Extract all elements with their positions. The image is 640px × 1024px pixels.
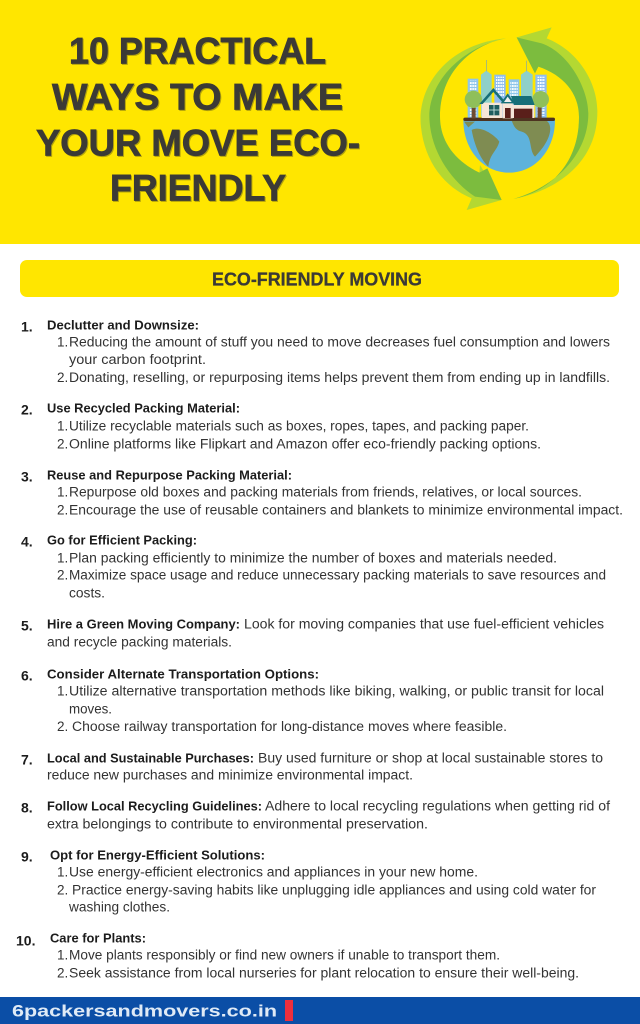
tip 2: use recycled packing material: 2.: [21, 402, 33, 418]
header panel: [0, 0, 640, 244]
tip 9: opt for energy-efficient solutions: Opt for Energy-Efficient Solutions:: [50, 848, 265, 862]
tip 6: consider alternate transportation options: [21, 666, 604, 734]
icon: recycling arrows around globe with house: [421, 27, 597, 210]
tip 4: go for efficient packing: 1.: [57, 550, 68, 566]
title: 10 PRACTICAL: [70, 32, 327, 72]
tip 10: care for plants: Move plants responsibly or find new owners if unable to transport them.: [69, 948, 500, 962]
tip 9: opt for energy-efficient solutions: 9.: [21, 848, 33, 864]
tip 4: go for efficient packing: 2.: [57, 568, 68, 582]
tip 4: go for efficient packing: [21, 532, 606, 600]
section heading bar: ECO-FRIENDLY MOVING: [212, 270, 422, 290]
tip 1: declutter and downsize: [21, 318, 610, 385]
tip 10: care for plants: Seek assistance from local nurseries for plant relocation to ensure their well-being.: [69, 966, 579, 980]
tip 3: reuse and repurpose packing material: 3.: [21, 468, 33, 484]
tip 2: use recycled packing material: Utilize recyclable materials such as boxes, ropes, tapes, and packing paper.: [69, 418, 529, 434]
tip 2: use recycled packing material: Online platforms like Flipkart and Amazon offer eco-friendly packing options.: [69, 436, 541, 452]
tip 6: consider alternate transportation options: 1.: [57, 684, 68, 698]
tip 5: hire a green moving company: Hire a Green Moving Company:: [47, 616, 240, 632]
icon: right arrow: [513, 27, 597, 199]
tip 1: declutter and downsize: Declutter and Downsize:: [47, 318, 199, 332]
tip 1: declutter and downsize: Reducing the amount of stuff you need to move decreases fuel consumption and lowers: [69, 334, 610, 350]
tip 5: hire a green moving company: and recycle packing materials.: [47, 634, 232, 650]
icon: red accent block: [285, 1000, 293, 1021]
tips list: [16, 318, 623, 980]
title: WAYS TO MAKE: [52, 76, 343, 118]
tip 6: consider alternate transportation options: Choose railway transportation for long-distance moves where feasible.: [72, 719, 507, 734]
icon: house: [479, 88, 535, 118]
icon: city buildings: [468, 60, 547, 118]
tip 5: hire a green moving company: [21, 616, 604, 650]
title: WAYS TO MAKE: [53, 78, 344, 118]
tip 8: follow local recycling guidelines: Adhere to local recycling regulations when getting rid of: [265, 798, 610, 814]
tip 5: hire a green moving company: 5.: [21, 618, 33, 634]
tip 7: local and sustainable purchases: Local and Sustainable Purchases:: [47, 750, 254, 766]
tip 5: hire a green moving company: Look for moving companies that use fuel-efficient vehicles: [244, 616, 604, 632]
tip 6: consider alternate transportation options: 6.: [21, 668, 33, 684]
tip 4: go for efficient packing: 4.: [21, 534, 33, 550]
tip 6: consider alternate transportation options: Utilize alternative transportation methods like biking, walking, or public transit for local: [69, 684, 604, 698]
tip 1: declutter and downsize: 2.: [57, 370, 68, 385]
tip 2: use recycled packing material: 1.: [57, 418, 68, 434]
tip 8: follow local recycling guidelines: Follow Local Recycling Guidelines:: [47, 798, 262, 814]
tip 3: reuse and repurpose packing material: 1.: [57, 484, 68, 500]
tip 4: go for efficient packing: Go for Efficient Packing:: [47, 532, 197, 548]
tip 9: opt for energy-efficient solutions: 2.: [57, 882, 68, 898]
tip 9: opt for energy-efficient solutions: [21, 848, 597, 914]
tip 7: local and sustainable purchases: [21, 750, 603, 782]
tip 3: reuse and repurpose packing material: 2.: [57, 502, 68, 518]
tip 4: go for efficient packing: costs.: [69, 586, 105, 600]
section heading bar: [20, 260, 619, 297]
tip 4: go for efficient packing: Maximize space usage and reduce unnecessary packing materials to save resources and: [69, 568, 606, 582]
tip 3: reuse and repurpose packing material: [21, 468, 623, 518]
tip 1: declutter and downsize: 1.: [21, 318, 33, 334]
tip 6: consider alternate transportation options: moves.: [69, 702, 112, 716]
tip 3: reuse and repurpose packing material: Repurpose old boxes and packing materials from friends, relatives, or local sources.: [69, 484, 582, 500]
tip 10: care for plants: [16, 930, 579, 980]
tip 7: local and sustainable purchases: reduce new purchases and minimize environmental impact.: [47, 768, 413, 782]
tip 8: follow local recycling guidelines: [21, 798, 610, 832]
tip 9: opt for energy-efficient solutions: 1.: [57, 864, 68, 880]
icon: globe: [463, 118, 555, 173]
tip 2: use recycled packing material: Use Recycled Packing Material:: [47, 400, 240, 416]
tip 9: opt for energy-efficient solutions: Use energy-efficient electronics and appliances in your new home.: [69, 864, 478, 880]
tip 6: consider alternate transportation options: Consider Alternate Transportation Options:: [47, 666, 319, 682]
icon: trees: [465, 91, 549, 118]
tip 2: use recycled packing material: [21, 400, 541, 452]
tip 10: care for plants: 10.: [16, 932, 35, 948]
tip 1: declutter and downsize: Donating, reselling, or repurposing items helps prevent them from ending up in landfills.: [69, 370, 610, 385]
tip 1: declutter and downsize: your carbon footprint.: [69, 352, 206, 367]
tip 8: follow local recycling guidelines: extra belongings to contribute to environmental preservation.: [47, 816, 428, 832]
title: FRIENDLY: [110, 168, 286, 208]
title: [36, 30, 361, 210]
tip 4: go for efficient packing: Plan packing efficiently to minimize the number of boxes and materials needed.: [69, 550, 557, 566]
footer bar: [0, 997, 640, 1024]
title: YOUR MOVE ECO-: [37, 124, 361, 164]
icon: left arrow: [421, 38, 506, 210]
tip 7: local and sustainable purchases: 7.: [21, 752, 33, 768]
tip 3: reuse and repurpose packing material: Reuse and Repurpose Packing Material:: [47, 468, 292, 482]
tip 8: follow local recycling guidelines: 8.: [21, 800, 33, 816]
tip 7: local and sustainable purchases: Buy used furniture or shop at local sustainable stores to: [258, 750, 603, 766]
tip 10: care for plants: Care for Plants:: [50, 930, 146, 946]
tip 9: opt for energy-efficient solutions: Practice energy-saving habits like unplugging idle appliances and using cold water for: [72, 882, 597, 898]
tip 10: care for plants: 1.: [57, 948, 68, 962]
tip 9: opt for energy-efficient solutions: washing clothes.: [68, 900, 170, 914]
tip 3: reuse and repurpose packing material: Encourage the use of reusable containers and blankets to minimize environmental impact.: [69, 502, 623, 518]
tip 2: use recycled packing material: 2.: [57, 436, 68, 452]
tip 1: declutter and downsize: 1.: [57, 334, 68, 350]
tip 6: consider alternate transportation options: 2.: [57, 719, 68, 734]
footer bar: 6packersandmovers.co.in: [12, 1002, 277, 1020]
tip 10: care for plants: 2.: [57, 966, 68, 980]
title: YOUR MOVE ECO-: [36, 122, 360, 164]
title: FRIENDLY: [111, 168, 287, 210]
title: 10 PRACTICAL: [69, 30, 326, 72]
